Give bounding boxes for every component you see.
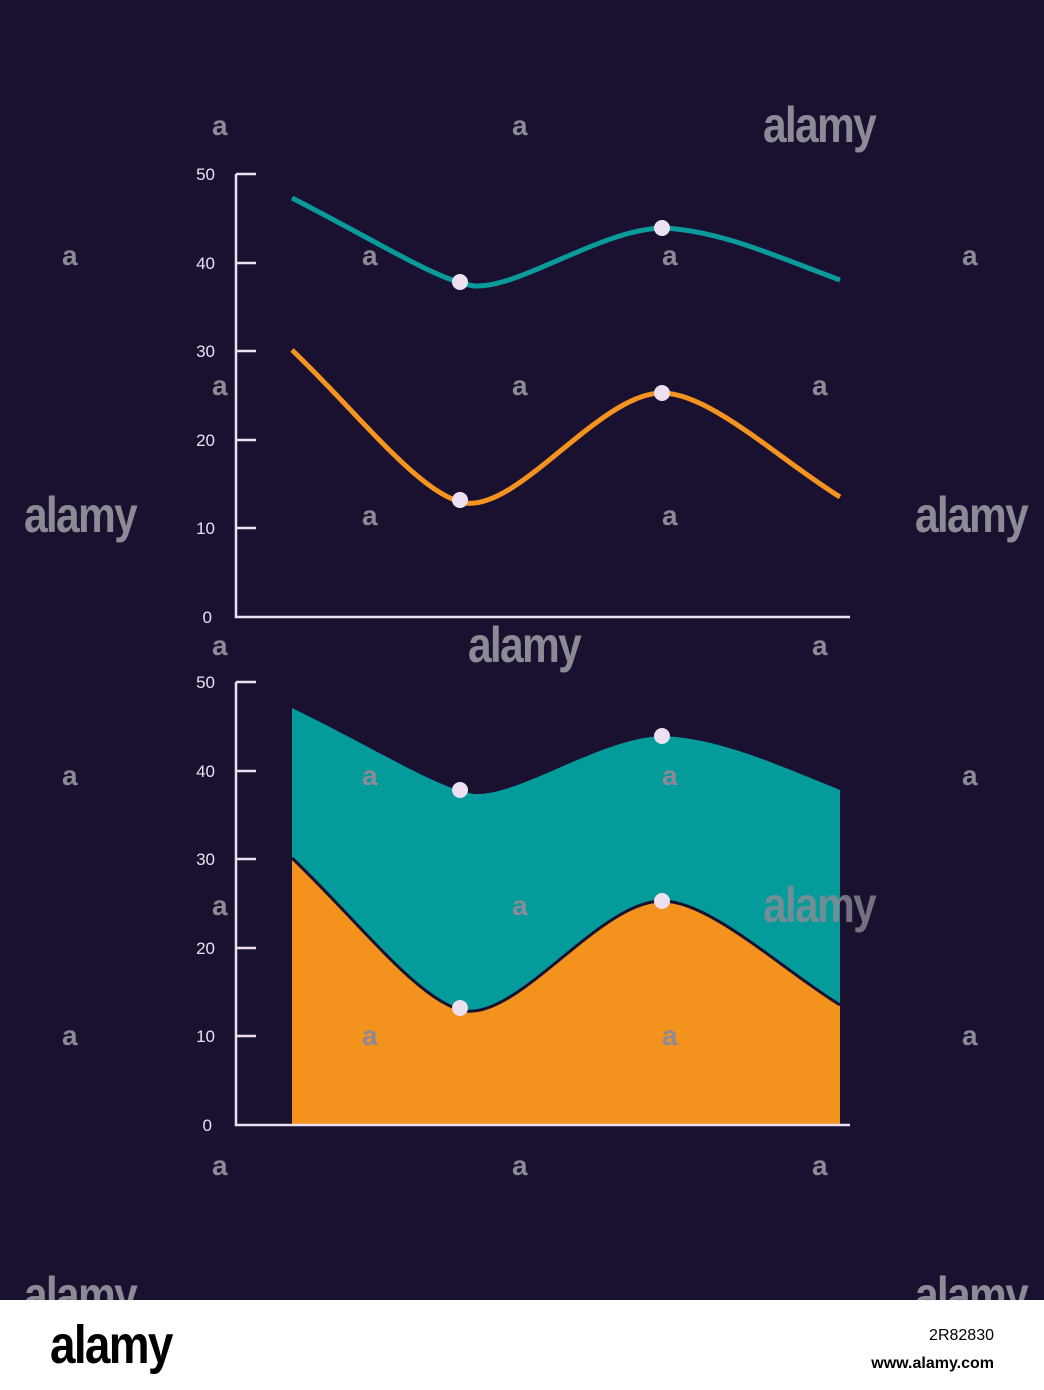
watermarks: a — [662, 500, 678, 531]
watermarks: a — [362, 1020, 378, 1051]
watermarks: a — [512, 1150, 528, 1181]
y labels: 10 — [196, 1027, 215, 1046]
footer id — [871, 1327, 994, 1372]
watermarks: a — [812, 1150, 828, 1181]
orange area — [292, 858, 840, 1125]
watermarks: a — [62, 240, 78, 271]
y labels: 40 — [196, 254, 215, 273]
watermarks: a — [812, 370, 828, 401]
watermarks: a — [62, 1020, 78, 1051]
footer id: 2R82830 — [929, 1327, 994, 1344]
watermarks: alamy — [763, 97, 875, 153]
teal area — [292, 708, 840, 1011]
watermarks: a — [812, 630, 828, 661]
watermarks: a — [212, 890, 228, 921]
chart: line chart — [196, 165, 850, 627]
watermarks: alamy — [468, 617, 580, 673]
orange line — [292, 350, 840, 503]
watermarks: alamy — [915, 487, 1027, 543]
watermarks: a — [962, 240, 978, 271]
watermarks: a — [962, 760, 978, 791]
watermarks: a — [362, 500, 378, 531]
watermarks: alamy — [763, 877, 875, 933]
watermarks: a — [512, 370, 528, 401]
watermarks: a — [212, 110, 228, 141]
watermarks: alamy — [915, 1267, 1027, 1323]
watermarks: a — [62, 760, 78, 791]
y labels: 10 — [196, 519, 215, 538]
watermarks: alamy — [24, 1267, 136, 1323]
y labels: 30 — [196, 342, 215, 361]
y labels — [196, 673, 215, 1135]
axes — [236, 174, 850, 617]
watermarks: a — [212, 1150, 228, 1181]
footer id: www.alamy.com — [871, 1355, 994, 1372]
watermarks: a — [512, 890, 528, 921]
chart: stacked area chart — [196, 673, 850, 1135]
watermarks: a — [662, 240, 678, 271]
watermarks: a — [362, 760, 378, 791]
y labels: 50 — [196, 165, 215, 184]
axes — [236, 682, 850, 1125]
y labels: 0 — [203, 1116, 212, 1135]
y labels: 0 — [203, 608, 212, 627]
watermarks: a — [512, 110, 528, 141]
y labels: 20 — [196, 939, 215, 958]
watermarks: a — [662, 760, 678, 791]
data points — [452, 728, 670, 1016]
data points — [452, 220, 670, 508]
y labels: 20 — [196, 431, 215, 450]
watermarks: a — [962, 1020, 978, 1051]
y labels: 50 — [196, 673, 215, 692]
watermarks: alamy — [24, 487, 136, 543]
teal line — [292, 198, 840, 286]
watermarks: a — [362, 240, 378, 271]
y labels: 30 — [196, 850, 215, 869]
y labels: 40 — [196, 762, 215, 781]
y labels — [196, 165, 215, 627]
watermarks: a — [212, 630, 228, 661]
watermarks: a — [212, 370, 228, 401]
footer band — [0, 1300, 1044, 1390]
watermarks: a — [662, 1020, 678, 1051]
footer logo: alamy — [50, 1315, 172, 1375]
